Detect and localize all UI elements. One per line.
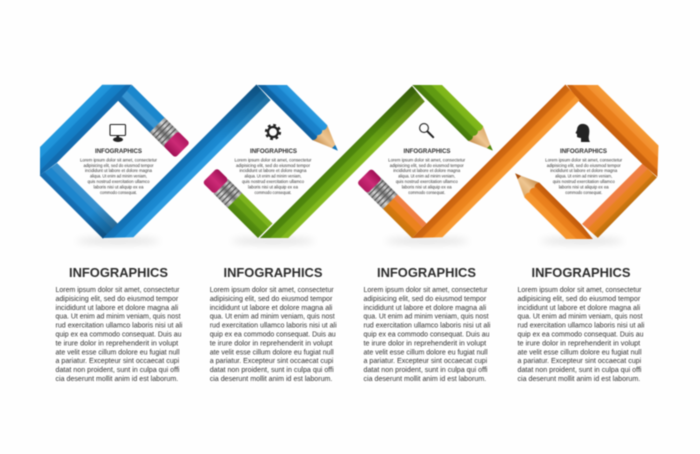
column 3 heading and text: datat non proident, sunt in culpa qui offi <box>364 365 488 374</box>
diamond 3 text: commodo consequat. <box>408 190 445 195</box>
diamond 1 text: aliqua. Ut enim ad minim veniam, <box>90 174 147 179</box>
column 3 heading and text: quip ex ea commodo consequat. Duis au <box>364 330 490 338</box>
column 4 heading and text: INFOGRAPHICS <box>532 265 631 280</box>
column 2 heading and text: Lorem ipsum dolor sit amet, consectetur <box>210 285 334 294</box>
blue band, lower left of first diamond <box>40 161 118 239</box>
green pointed pencil, third diamond <box>412 70 500 158</box>
column 3 heading and text: te irure dolor in reprehenderit in volupt <box>364 338 487 347</box>
column 1 heading and text: datat non proident, sunt in culpa qui offi <box>56 365 180 374</box>
orange band, lower right of fourth diamond <box>582 163 658 239</box>
column 2 heading and text: a pariatur. Excepteur sint occaecat cupi <box>210 356 334 365</box>
column 2 heading and text: ate velit esse cillum dolore eu fugiat null <box>210 347 334 356</box>
column 2 heading and text: te irure dolor in reprehenderit in volupt <box>210 338 333 347</box>
column 2 heading and text: adipisicing elit, sed do eiusmod tempor <box>210 294 333 303</box>
column 4 heading and text: a pariatur. Excepteur sint occaecat cupi <box>518 356 641 365</box>
diamond 1 text: quis nostrud exercitation ullamco <box>88 179 150 184</box>
column 4 heading and text: incididunt ut labore et dolore magna ali <box>518 303 640 312</box>
diamond 4 text: Lorem ipsum dolor sit amet, consectetur <box>545 157 623 162</box>
diamond 1 text: adipisicing elit, sed do eiusmod tempor <box>84 163 154 168</box>
column 3 heading and text: adipisicing elit, sed do eiusmod tempor <box>364 294 487 303</box>
diamond 2 text: INFOGRAPHICS <box>250 148 297 155</box>
column 2 heading and text: quip ex ea commodo consequat. Duis au <box>210 330 336 338</box>
column 4 heading and text: Lorem ipsum dolor sit amet, consectetur <box>518 285 642 294</box>
diamond 4 text: laboris nisi ut aliquip ex ea <box>559 184 609 189</box>
ground shadows <box>76 238 624 244</box>
column 3 heading and text: Lorem ipsum dolor sit amet, consectetur <box>364 285 488 294</box>
column 1 heading and text: qua. Ut enim ad minim veniam, quis nost <box>56 312 181 321</box>
diamond 2 text: incididunt ut labore et dolore magna <box>240 168 307 173</box>
diamond 3 text <box>388 148 466 195</box>
diamond 4 text: incididunt ut labore et dolore magna <box>550 168 618 173</box>
diamond 3 text: adipisicing elit, sed do eiusmod tempor <box>390 163 464 168</box>
column 4 heading and text: adipisicing elit, sed do eiusmod tempor <box>518 294 641 303</box>
diamond 1 text: INFOGRAPHICS <box>95 148 142 155</box>
long orange diagonal band <box>412 85 580 253</box>
column 4 heading and text: rud exercitation ullamco laboris nisi ut ali <box>518 321 645 330</box>
diamond 3 text: laboris nisi ut aliquip ex ea <box>402 184 452 189</box>
diamond 2 text <box>234 148 312 195</box>
diamond 4 text: INFOGRAPHICS <box>560 148 607 155</box>
column 2 heading and text: rud exercitation ullamco laboris nisi ut ali <box>210 321 337 330</box>
column 3 heading and text: ate velit esse cillum dolore eu fugiat null <box>364 347 488 356</box>
column 4 heading and text: te irure dolor in reprehenderit in volupt <box>518 338 641 347</box>
column 1 heading and text: te irure dolor in reprehenderit in volupt <box>56 338 179 347</box>
column 2 heading and text: INFOGRAPHICS <box>224 265 323 280</box>
orange eraser pencil, third diamond <box>357 168 426 238</box>
blue pointed pencil, second diamond <box>257 70 345 158</box>
orange band, upper right of fourth diamond <box>565 69 674 178</box>
column 4 heading and text: datat non proident, sunt in culpa qui offi <box>518 365 642 374</box>
diamond 2 text: quis nostrud exercitation ullamco <box>242 179 305 184</box>
diamond 1 text: Lorem ipsum dolor sit amet, consectetur <box>80 157 158 162</box>
column 4 heading and text: quip ex ea commodo consequat. Duis au <box>518 330 644 338</box>
diamond 4 text: commodo consequat. <box>565 190 602 195</box>
blue band, upper left of first diamond <box>26 70 133 177</box>
icon: magnifier <box>420 124 433 137</box>
diamond 3 text: INFOGRAPHICS <box>404 148 450 155</box>
column 2 heading and text: cia deserunt mollit anim id est laborum. <box>210 374 332 383</box>
column 2 heading and text: incididunt ut labore et dolore magna ali <box>210 303 333 312</box>
orange pointed pencil, fourth diamond <box>508 166 594 252</box>
column 1 heading and text: rud exercitation ullamco laboris nisi ut ali <box>56 321 183 330</box>
diamond 1 text: laboris nisi ut aliquip ex ea <box>94 184 144 189</box>
column 3 heading and text: rud exercitation ullamco laboris nisi ut ali <box>364 321 491 330</box>
long green diagonal band <box>260 86 426 252</box>
diamond 4 text: quis nostrud exercitation ullamco <box>553 179 615 184</box>
column 1 heading and text: incididunt ut labore et dolore magna ali <box>56 303 178 312</box>
column 1 heading and text: quip ex ea commodo consequat. Duis au <box>56 330 182 338</box>
column 1 heading and text: a pariatur. Excepteur sint occaecat cupi <box>56 356 179 365</box>
column 3 heading and text <box>364 265 491 383</box>
long blue diagonal band <box>103 85 271 253</box>
column 4 heading and text: ate velit esse cillum dolore eu fugiat null <box>518 347 642 356</box>
icon: monitor <box>110 124 126 142</box>
column 1 heading and text: INFOGRAPHICS <box>69 265 168 280</box>
diamond 3 text: quis nostrud exercitation ullamco <box>396 179 458 184</box>
diamond 2 text: Lorem ipsum dolor sit amet, consectetur <box>234 157 312 162</box>
diamond 1 text: incididunt ut labore et dolore magna <box>85 168 153 173</box>
column 3 heading and text: qua. Ut enim ad minim veniam, quis nost <box>364 312 489 321</box>
column 1 heading and text: adipisicing elit, sed do eiusmod tempor <box>56 294 179 303</box>
diamond 4 text: adipisicing elit, sed do eiusmod tempor <box>547 163 621 168</box>
diamond 1 text <box>80 148 158 195</box>
column 1 heading and text: cia deserunt mollit anim id est laborum. <box>56 374 178 383</box>
column 4 heading and text: cia deserunt mollit anim id est laborum. <box>518 374 640 383</box>
icon: head silhouette <box>576 124 590 142</box>
column 3 heading and text: cia deserunt mollit anim id est laborum. <box>364 374 486 383</box>
column 1 heading and text <box>56 265 183 383</box>
diamond 3 text: incididunt ut labore et dolore magna <box>393 168 461 173</box>
column 2 heading and text: qua. Ut enim ad minim veniam, quis nost <box>210 312 335 321</box>
diamond 2 text: commodo consequat. <box>254 190 292 195</box>
column 4 heading and text <box>518 265 645 383</box>
diamond 2 text: adipisicing elit, sed do eiusmod tempor <box>236 163 311 168</box>
column 3 heading and text: a pariatur. Excepteur sint occaecat cupi <box>364 356 487 365</box>
icon: gear <box>266 125 280 139</box>
column 2 heading and text: datat non proident, sunt in culpa qui offi <box>210 365 334 374</box>
diamond 4 text <box>545 148 623 195</box>
diamond 4 text: aliqua. Ut enim ad minim veniam, <box>555 174 612 179</box>
blue eraser pencil, upper right of first diamond <box>117 85 190 158</box>
column 3 heading and text: incididunt ut labore et dolore magna ali <box>364 303 486 312</box>
column 1 heading and text: ate velit esse cillum dolore eu fugiat null <box>56 347 180 356</box>
diamond 3 text: aliqua. Ut enim ad minim veniam, <box>398 174 455 179</box>
diamond 2 text: laboris nisi ut aliquip ex ea <box>248 184 299 189</box>
diamond 2 text: aliqua. Ut enim ad minim veniam, <box>244 174 302 179</box>
green eraser pencil, second diamond <box>202 168 272 238</box>
column 2 heading and text <box>210 265 337 383</box>
column 3 heading and text: INFOGRAPHICS <box>377 265 476 280</box>
column 1 heading and text: Lorem ipsum dolor sit amet, consectetur <box>56 285 180 294</box>
diamond 1 text: commodo consequat. <box>100 190 137 195</box>
diamond 3 text: Lorem ipsum dolor sit amet, consectetur <box>388 157 466 162</box>
column 4 heading and text: qua. Ut enim ad minim veniam, quis nost <box>518 312 643 321</box>
